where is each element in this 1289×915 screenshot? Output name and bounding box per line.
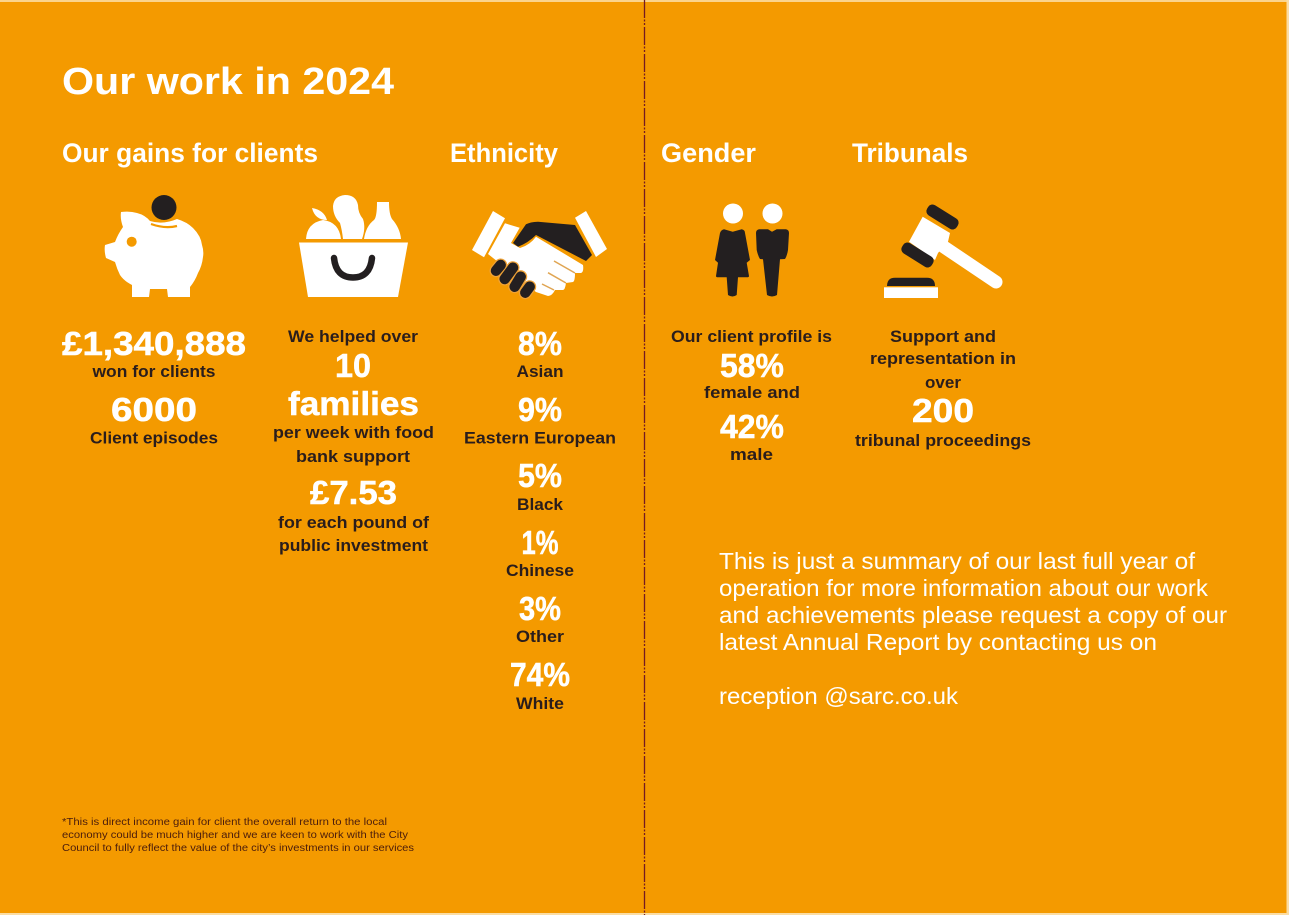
text block: summary and contact: latest Annual Report by contacting us on — [719, 629, 1157, 655]
column: food bank and investment stats: 10 — [335, 347, 371, 384]
text block: summary and contact: This is just a summary of our last full year of — [719, 548, 1196, 574]
column: food bank and investment stats: families — [288, 385, 419, 422]
column: client gains stats: Client episodes — [90, 428, 218, 448]
column: gender stats: female and — [704, 383, 800, 402]
column: gender stats: 42% — [720, 408, 784, 445]
column: ethnicity stats: Other — [516, 627, 564, 646]
heading: tribunals: Tribunals — [852, 138, 968, 168]
footnote: Council to fully reflect the value of the city’s investments in our services — [62, 843, 414, 854]
column: ethnicity stats: Asian — [516, 362, 564, 381]
icon: gavel — [884, 203, 996, 298]
column: ethnicity stats — [464, 325, 616, 713]
footnote — [62, 817, 414, 854]
icon: piggy bank — [105, 195, 203, 297]
column: ethnicity stats: Chinese — [506, 561, 574, 580]
column: tribunal stats: representation in — [870, 349, 1016, 368]
column: ethnicity stats: White — [516, 694, 564, 713]
column: food bank and investment stats — [273, 327, 434, 555]
column: tribunal stats: 200 — [912, 392, 974, 429]
column: client gains stats: won for clients — [91, 362, 216, 381]
icon: woman and man figures — [715, 204, 789, 296]
heading: our gains for clients: Our gains for clients — [62, 138, 318, 168]
column: food bank and investment stats: £7.53 — [310, 474, 397, 511]
text block: summary and contact: operation for more information about our work — [719, 575, 1208, 601]
icon: food basket — [299, 195, 408, 297]
column: ethnicity stats: 3% — [519, 590, 561, 627]
text block: summary and contact — [719, 548, 1227, 709]
text block: summary and contact: reception @sarc.co.uk — [719, 683, 958, 709]
column: gender stats: male — [730, 445, 773, 464]
column: tribunal stats: over — [925, 373, 961, 392]
column: ethnicity stats: 5% — [518, 457, 562, 494]
column: ethnicity stats: 1% — [522, 524, 558, 561]
heading: gender: Gender — [661, 138, 756, 168]
column: food bank and investment stats: for each pound of — [278, 513, 429, 532]
column: food bank and investment stats: per week with food — [273, 423, 434, 442]
column: tribunal stats: Support and — [890, 327, 996, 346]
column: client gains stats — [62, 325, 246, 448]
column: gender stats — [671, 327, 832, 464]
column: ethnicity stats: Black — [517, 495, 564, 514]
icon: handshake — [472, 211, 607, 296]
column: client gains stats: 6000 — [111, 391, 197, 428]
column: tribunal stats: tribunal proceedings — [855, 431, 1031, 450]
footnote: *This is direct income gain for client the overall return to the local — [62, 817, 387, 828]
column: ethnicity stats: 74% — [510, 656, 570, 693]
column: ethnicity stats: 9% — [518, 391, 562, 428]
column: gender stats: Our client profile is — [671, 327, 832, 346]
text block: summary and contact: and achievements please request a copy of our — [719, 602, 1227, 628]
footnote: economy could be much higher and we are keen to work with the City — [62, 830, 408, 841]
column: tribunal stats — [855, 327, 1031, 450]
column: client gains stats: £1,340,888 — [62, 325, 246, 362]
column: food bank and investment stats: We helped over — [288, 327, 418, 346]
title: Our work in 2024 — [62, 61, 394, 103]
column: food bank and investment stats: bank support — [296, 447, 410, 466]
column: ethnicity stats: Eastern European — [464, 428, 616, 448]
heading: ethnicity: Ethnicity — [450, 138, 558, 168]
column: food bank and investment stats: public investment — [279, 536, 428, 555]
column: gender stats: 58% — [720, 347, 784, 384]
column: ethnicity stats: 8% — [518, 325, 562, 362]
